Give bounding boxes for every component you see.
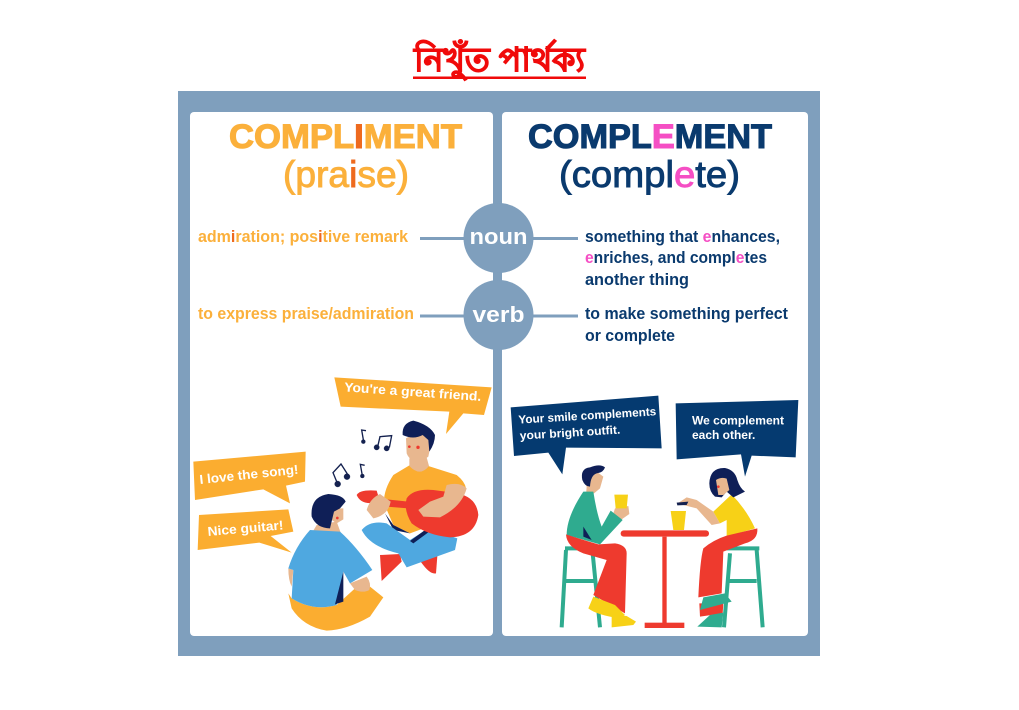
heading: COMPLIMENT: COMPLIMENT xyxy=(229,118,462,156)
connector: noun xyxy=(420,203,578,273)
figure: listener xyxy=(288,494,383,631)
title: নিখুঁত পার্থক্য xyxy=(413,39,586,81)
table with cups xyxy=(621,511,709,628)
speech bubble: complement each other xyxy=(676,400,798,477)
noun definition: complement: something that enhances, xyxy=(585,228,780,246)
speech bubble: nice guitar: Nice guitar! xyxy=(207,517,284,539)
speech bubble: complement each other: We complement xyxy=(692,415,784,428)
figure: man on stool xyxy=(562,465,636,627)
figure: guitar player xyxy=(357,421,478,581)
noun definition: compliment: admiration; positive remark xyxy=(198,228,409,246)
noun definition: complement: enriches, and completes xyxy=(585,249,767,267)
connector: noun: noun xyxy=(470,224,528,249)
speech bubble: smile complements xyxy=(511,396,662,474)
verb definition: compliment: to express praise/admiration xyxy=(198,305,414,323)
speech bubble: complement each other: each other. xyxy=(692,429,755,442)
noun definition: complement: another thing xyxy=(585,271,689,289)
illustration: friends with guitar xyxy=(193,377,492,631)
verb definition: complement: or complete xyxy=(585,327,675,345)
verb definition: complement xyxy=(585,305,788,345)
speech bubble: great friend: You're a great friend. xyxy=(344,379,482,404)
speech bubble: nice guitar xyxy=(198,509,293,553)
speech bubble: love the song: I love the song! xyxy=(199,462,299,487)
speech bubble: smile complements: Your smile complements xyxy=(518,405,657,427)
subheading: complete: (complete) xyxy=(559,154,740,195)
panel: complement xyxy=(502,112,808,636)
figure: woman on stool xyxy=(677,468,763,627)
icon: music notes xyxy=(333,430,392,487)
connector: verb xyxy=(420,280,578,350)
subheading: praise: (praise) xyxy=(283,154,409,195)
verb definition: complement: to make something perfect xyxy=(585,305,788,323)
illustration: friends at table xyxy=(511,396,798,628)
heading: COMPLEMENT: COMPLEMENT xyxy=(528,118,772,156)
noun definition: complement xyxy=(585,228,780,289)
panel: compliment xyxy=(190,112,493,636)
speech bubble: smile complements: your bright outfit. xyxy=(519,424,621,443)
speech bubble: great friend xyxy=(334,377,492,434)
connector: verb: verb xyxy=(472,302,524,327)
speech bubble: love the song xyxy=(193,452,306,503)
infographic frame xyxy=(178,91,820,656)
